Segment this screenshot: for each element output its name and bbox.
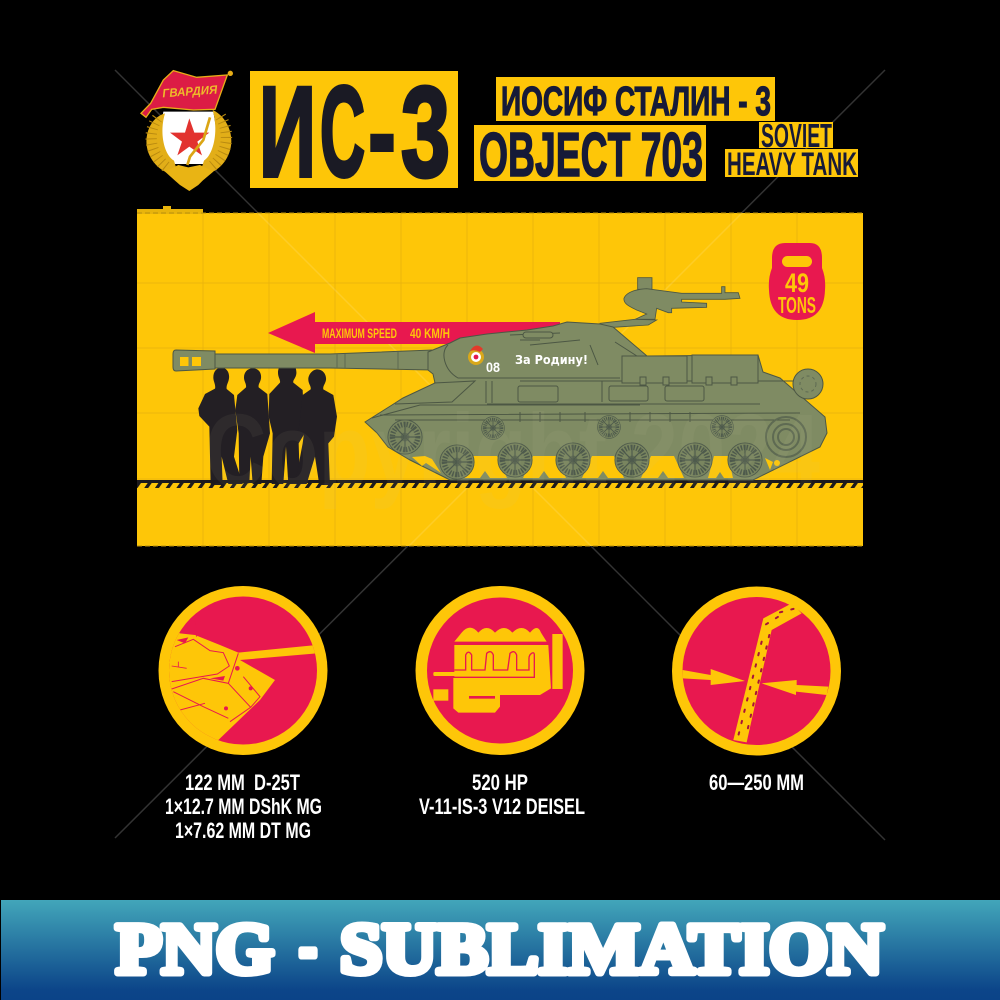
ground line	[137, 480, 863, 488]
track gaps	[412, 456, 780, 478]
icon: main gun	[158, 586, 328, 763]
banner: PNG sublimation: PNG	[116, 909, 274, 989]
silhouettes: crew of four	[198, 362, 337, 485]
banner: PNG sublimation: -	[299, 906, 317, 986]
tank details	[372, 332, 820, 422]
fuel drum	[793, 369, 823, 399]
caption: armament: 1×7.62 MM DT MG	[175, 818, 311, 843]
arrow: maximum speed	[268, 312, 560, 353]
weight icon: 49 tons	[769, 243, 825, 320]
caption: engine: V-11-IS-3 V12 DEISEL	[419, 794, 585, 819]
illustration: IS-3 tank	[173, 278, 827, 480]
subtitle: Soviet heavy tank: SOVIET	[761, 117, 832, 154]
watermark lines	[115, 70, 885, 840]
return rollers	[388, 416, 733, 454]
caption: armament	[165, 770, 322, 843]
emblem: guards badge	[141, 71, 233, 191]
caption: engine: 520 HP	[472, 770, 528, 795]
idler wheel	[766, 417, 806, 457]
subtitle: Soviet heavy tank: HEAVY TANK	[727, 146, 857, 182]
caption: armament: 122 MM D-25T	[185, 770, 300, 795]
caption: armament: 1×12.7 MM DShK MG	[165, 794, 322, 819]
slogan: За Родину!	[515, 353, 588, 367]
guards marking	[468, 345, 484, 365]
watermark text: Copyright 2024	[205, 393, 820, 510]
main gun	[173, 350, 432, 371]
subtitle: Joseph Stalin 3: ИОСИФ СТАЛИН - 3	[501, 78, 771, 124]
weight icon: 49 tons: TONS	[778, 292, 816, 318]
emblem: guards badge: ГВАРДИЯ	[162, 83, 218, 100]
panel: tank profile	[137, 206, 863, 546]
banner: PNG sublimation: SUBLIMATION	[340, 909, 883, 989]
stowage boxes	[622, 355, 758, 385]
subtitle: Object 703: OBJECT 703	[479, 121, 703, 190]
caption: engine	[419, 770, 585, 819]
icon: engine	[416, 586, 584, 755]
title: IS-3: И	[259, 61, 316, 204]
title: IS-3: С	[320, 61, 365, 204]
caption: armour: 60—250 MM	[709, 770, 804, 795]
banner: PNG sublimation	[1, 900, 1000, 1000]
title: IS-3: 3	[401, 61, 450, 204]
anti-aircraft machine gun	[600, 278, 740, 327]
weight icon: 49 tons: 49	[785, 268, 809, 298]
arrow: maximum speed: MAXIMUM SPEED	[322, 326, 397, 341]
subtitle: Object 703	[474, 121, 706, 190]
hull and turret	[365, 322, 827, 480]
tank number: 08	[486, 359, 500, 375]
title: IS-3: -	[368, 61, 396, 204]
icon: armour	[672, 586, 841, 756]
road wheels	[440, 443, 762, 479]
subtitle: Soviet heavy tank	[725, 117, 858, 182]
subtitle: Joseph Stalin 3	[496, 77, 775, 124]
arrow: maximum speed: 40 KM/H	[410, 326, 450, 341]
title: IS-3	[250, 61, 458, 204]
